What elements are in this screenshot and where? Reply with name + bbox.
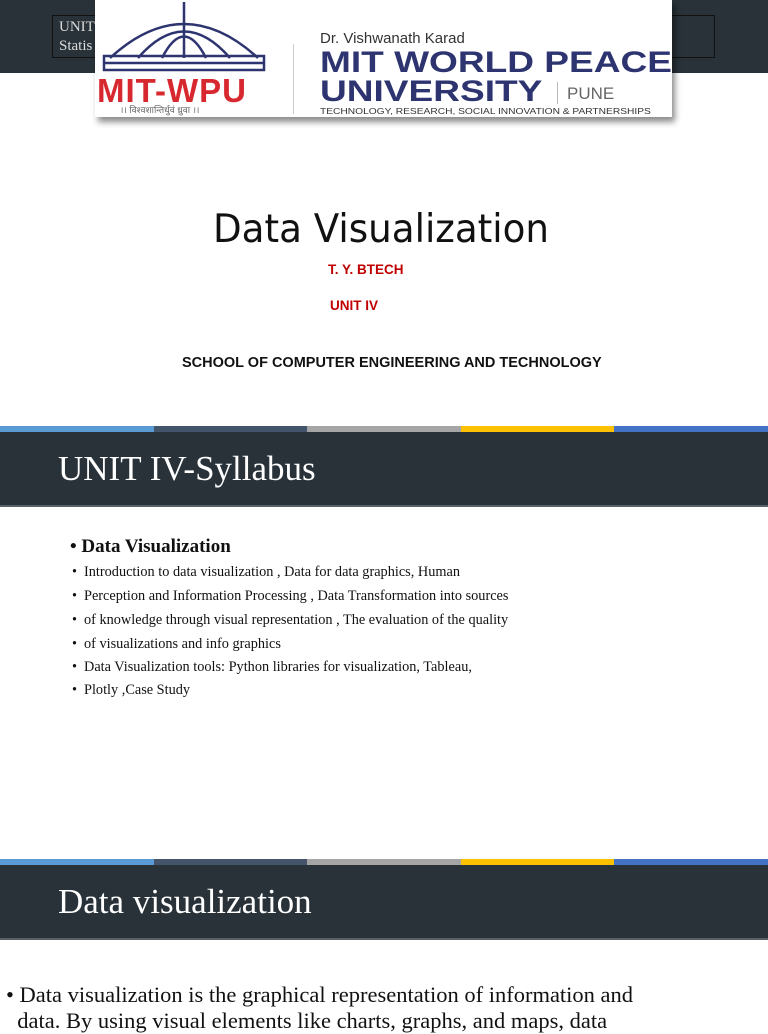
body text: • Data visualization is the graphical representation of information and [6,982,633,1007]
syllabus list: Introduction to data visualization , Data for data graphics, Human [84,564,460,580]
university name: Dr. Vishwanath Karad [320,30,465,47]
header box: Statis [59,38,92,54]
syllabus list: Plotly ,Case Study [84,682,190,698]
band: syllabus heading: UNIT IV-Syllabus [58,449,316,488]
body text [6,982,633,1033]
band: syllabus heading [0,432,768,507]
logo panel: ।। विश्वशान्तिर्धुवं ध्रुवा ।। [120,105,199,115]
body text: data. By using visual elements like charts, graphs, and maps, data [17,1008,607,1033]
syllabus list: of visualizations and info graphics [84,636,281,652]
logo panel: MIT WORLD PEACE [320,46,672,79]
logo panel: UNIVERSITY [320,75,542,108]
text: MIT-WPU: MIT-WPU [97,72,247,109]
top header bar [0,0,768,73]
syllabus list: Data Visualization tools: Python libraries for visualization, Tableau, [84,659,472,675]
subtitle: T. Y. BTECH [328,262,404,277]
logo panel [95,0,672,117]
header box [52,15,715,58]
syllabus list: Perception and Information Processing , Data Transformation into sources [84,588,508,604]
syllabus list: • Data Visualization [70,536,231,557]
band: data visualization heading: Data visualization [58,882,312,921]
text: UNIT IV [330,298,378,313]
text: SCHOOL OF COMPUTER ENGINEERING AND TECHNOLOGY [182,355,602,371]
syllabus list [70,536,508,698]
title: Data Visualization [213,207,549,252]
icon: dome [102,2,266,72]
band: data visualization heading [0,865,768,940]
syllabus list: of knowledge through visual representation , The evaluation of the quality [84,612,508,628]
logo panel: TECHNOLOGY, RESEARCH, SOCIAL INNOVATION & PARTNERSHIPS [320,106,651,116]
header box: UNIT [59,19,95,35]
logo panel: PUNE [567,84,614,103]
